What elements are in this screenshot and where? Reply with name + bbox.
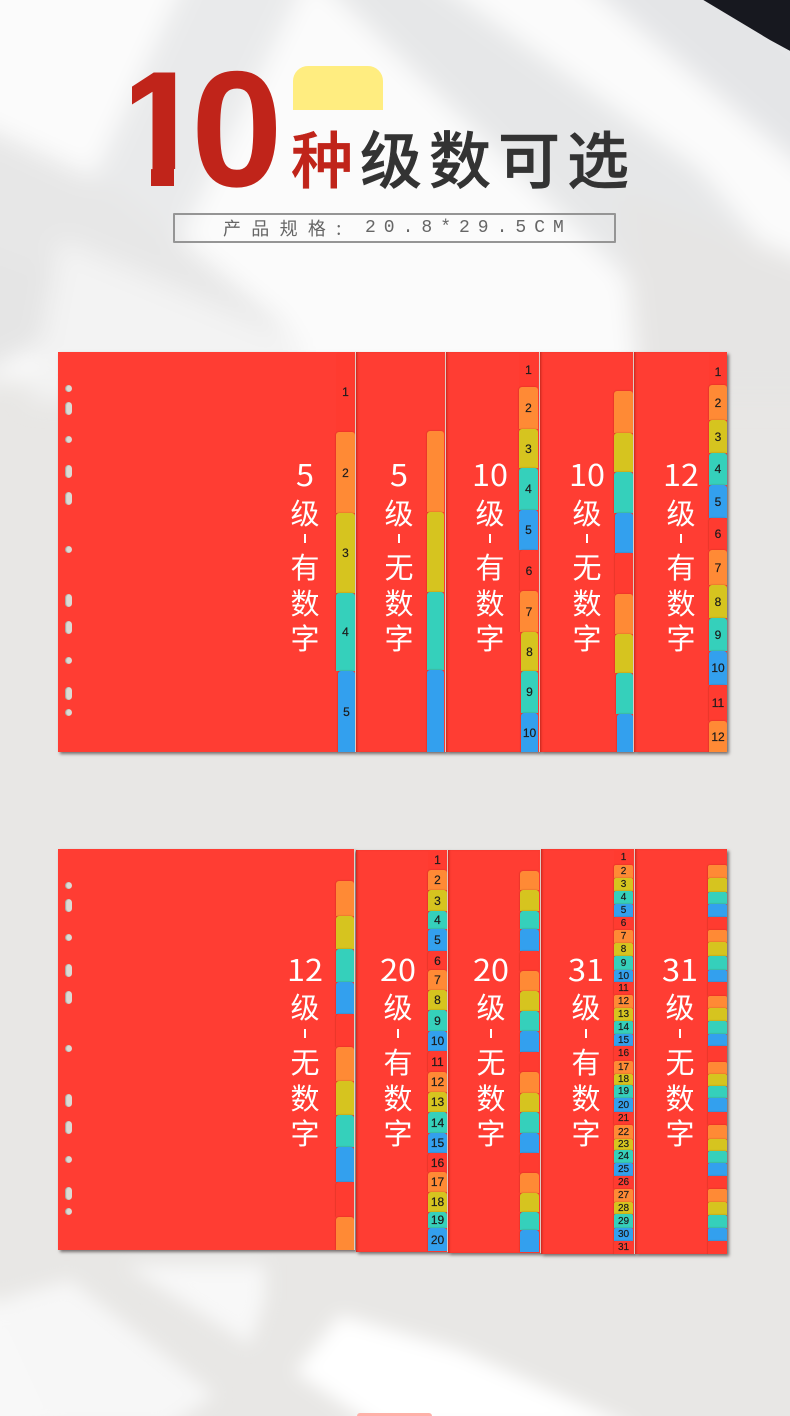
tabs: 5 numbered: 1 (342, 385, 349, 399)
label: 12 numbered: 字 (666, 616, 696, 658)
tabs: 5 numbered: 5 (343, 704, 350, 718)
tabs: 10 numbered: 9 (526, 685, 533, 699)
tabs: 20 numbered: 7 (434, 973, 441, 987)
tabs: 10 numbered: 1 (525, 362, 532, 376)
tabs: 12 numbered: 2 (715, 396, 721, 410)
label: 12 plain: 无 (290, 1040, 320, 1082)
big number 10 (132, 37, 283, 221)
tabs: 20 numbered: 16 (431, 1156, 444, 1170)
label: 5 numbered: 有 (290, 545, 320, 587)
label: 5 plain: 数 (384, 581, 414, 623)
tabs: 31 numbered: 2 (621, 866, 626, 877)
label: 12 numbered: 12 (663, 451, 699, 495)
label: 31 plain: 字 (665, 1111, 694, 1153)
label: 10 plain: 数 (572, 581, 602, 623)
tabs: 31 numbered: 13 (618, 1009, 629, 1020)
title text: 种级数可选 (291, 111, 636, 201)
label: 31 plain: 级 (665, 985, 694, 1027)
tabs: 31 numbered: 30 (618, 1229, 629, 1240)
tabs: 31 numbered: 31 (618, 1242, 629, 1253)
tabs: 31 numbered: 5 (621, 905, 626, 916)
label: 20 plain (473, 946, 509, 1153)
punch holes row 2 (65, 882, 72, 1215)
label: 5 numbered: 字 (290, 616, 320, 658)
label: 20 numbered: 有 (383, 1040, 412, 1082)
label: 20 numbered (380, 946, 416, 1153)
tabs: 31 numbered: 26 (618, 1177, 629, 1188)
label: 12 plain: 数 (290, 1076, 320, 1118)
tabs: 31 numbered: 21 (618, 1113, 629, 1124)
label: 5 plain: 5 (390, 451, 408, 495)
label: 12 plain (287, 946, 323, 1153)
tabs: 12 numbered: 4 (715, 462, 721, 476)
label: 12 numbered (663, 451, 699, 658)
tabs: 5 plain (426, 430, 444, 752)
label: 20 numbered: 级 (383, 985, 412, 1027)
label: 12 plain: 字 (290, 1111, 320, 1153)
tabs: 31 numbered: 24 (618, 1151, 629, 1162)
panel: 31 levels numbered (541, 849, 635, 1254)
tabs: 31 numbered: 9 (621, 958, 626, 968)
tabs: 12 numbered: 9 (715, 628, 721, 642)
label: 10 numbered: 有 (475, 545, 504, 587)
label: 31 numbered: 字 (571, 1111, 600, 1153)
tabs: 12 numbered: 3 (715, 430, 721, 444)
tabs: 20 numbered: 11 (431, 1054, 444, 1068)
label: 10 plain (569, 451, 605, 658)
tabs: 12 numbered: 10 (711, 661, 725, 675)
tabs: 5 numbered: 4 (342, 625, 349, 639)
label: 31 plain: 31 (662, 946, 698, 990)
tabs: 20 numbered: 20 (431, 1232, 444, 1246)
tabs: 20 numbered: 13 (431, 1095, 444, 1109)
panel: 20 levels plain (448, 850, 541, 1253)
tabs: 10 plain (613, 390, 633, 752)
bottom pink shape (357, 1413, 432, 1416)
label: 12 numbered: 数 (666, 581, 696, 623)
panel: 10 levels plain (540, 352, 634, 752)
tabs: 12 plain (335, 880, 354, 1250)
tabs: 31 numbered: 8 (621, 944, 626, 955)
label: 5 plain: 级 (384, 491, 414, 533)
label: 20 numbered: 数 (383, 1076, 412, 1118)
label: 31 plain: 数 (665, 1076, 694, 1118)
tabs: 31 numbered: 18 (618, 1074, 629, 1085)
label: 5 plain (384, 451, 414, 658)
tabs: 31 numbered: 28 (618, 1202, 629, 1214)
tabs: 31 numbered: 10 (618, 970, 629, 982)
tabs: 12 numbered (708, 364, 727, 752)
label: 10 plain: 字 (572, 616, 602, 658)
tabs: 20 numbered: 18 (431, 1195, 444, 1209)
tabs: 12 numbered: 5 (715, 494, 721, 508)
tabs: 20 numbered: 8 (434, 993, 441, 1007)
label: 12 numbered: 级 (666, 491, 696, 533)
tabs: 20 numbered: 3 (434, 894, 441, 908)
tabs: 5 numbered (335, 385, 355, 752)
tabs: 12 numbered: 8 (715, 594, 721, 608)
tabs: 31 numbered (613, 852, 633, 1254)
panel: 10 levels numbered (446, 352, 540, 752)
tabs: 31 numbered: 25 (618, 1164, 629, 1175)
panel: 31 levels plain (635, 849, 727, 1254)
label: 20 numbered: 20 (380, 946, 416, 990)
tabs: 31 numbered: 15 (618, 1034, 629, 1046)
label: 10 numbered: 字 (475, 616, 504, 658)
label: 10 plain: 无 (572, 545, 602, 587)
tabs: 20 plain (519, 870, 539, 1252)
tabs: 10 numbered: 5 (525, 523, 532, 537)
label: 20 numbered: 字 (383, 1111, 412, 1153)
label: 20 plain: 级 (476, 985, 506, 1027)
tabs: 31 numbered: 17 (618, 1062, 629, 1073)
panel: 5 levels numbered (58, 352, 356, 752)
product spec box: 20.8*29.5CM (365, 218, 572, 238)
tabs: 31 numbered: 27 (618, 1190, 629, 1201)
tabs: 12 numbered: 1 (715, 364, 721, 378)
label: 20 plain: 20 (473, 946, 509, 990)
big number 10: 1 (114, 37, 206, 221)
label: 31 numbered (568, 946, 604, 1153)
tabs: 31 numbered: 29 (618, 1216, 629, 1226)
tabs: 31 numbered: 1 (621, 852, 626, 862)
tabs: 10 numbered (518, 362, 538, 752)
label: 31 numbered: 有 (571, 1040, 600, 1082)
tabs: 20 numbered: 12 (431, 1075, 444, 1089)
product spec box (173, 213, 616, 243)
label: 5 plain: 无 (384, 545, 414, 587)
tabs: 31 numbered: 20 (618, 1100, 629, 1110)
product spec box: 产品规格: (223, 215, 352, 241)
tabs: 10 numbered: 10 (523, 726, 536, 740)
label: 31 plain: 无 (665, 1040, 694, 1082)
tabs: 10 numbered: 6 (526, 564, 532, 578)
panel: 20 levels numbered (356, 850, 448, 1252)
label: 20 plain: 字 (476, 1111, 506, 1153)
tabs: 20 numbered: 1 (434, 853, 441, 867)
tabs: 31 plain (707, 864, 727, 1254)
label: 31 plain (662, 946, 698, 1153)
label: 5 numbered (290, 451, 320, 658)
tabs: 31 numbered: 11 (618, 983, 629, 994)
tabs: 5 numbered: 3 (342, 546, 349, 560)
label: 31 numbered: 数 (571, 1076, 600, 1118)
tabs: 31 numbered: 23 (618, 1139, 629, 1150)
label: 5 plain: 字 (384, 616, 414, 658)
label: 5 numbered: 级 (290, 491, 320, 533)
tabs: 31 numbered: 14 (618, 1022, 629, 1033)
label: 10 numbered: 级 (475, 491, 504, 533)
panel: 12 levels numbered (634, 352, 727, 752)
tabs: 20 numbered: 17 (431, 1175, 444, 1189)
tabs: 10 numbered: 3 (525, 442, 532, 456)
big number 10: 0 (191, 37, 283, 221)
tabs: 10 numbered: 4 (525, 482, 532, 496)
tabs: 31 numbered: 16 (618, 1048, 629, 1059)
tabs: 31 numbered: 22 (618, 1126, 629, 1138)
tabs: 20 numbered (427, 853, 447, 1251)
label: 20 plain: 数 (476, 1076, 506, 1118)
tabs: 31 numbered: 7 (621, 931, 626, 942)
tabs: 20 numbered: 5 (434, 933, 441, 947)
tabs: 20 numbered: 14 (431, 1116, 444, 1130)
tabs: 10 numbered: 7 (526, 604, 532, 618)
label: 10 plain: 级 (572, 491, 602, 533)
label: 10 numbered: 数 (475, 581, 504, 623)
label: 5 numbered: 数 (290, 581, 320, 623)
tabs: 10 numbered: 8 (526, 644, 533, 658)
tabs: 20 numbered: 15 (431, 1136, 444, 1150)
tabs: 12 numbered: 7 (715, 560, 721, 574)
tabs: 31 numbered: 19 (618, 1086, 629, 1097)
tabs: 12 numbered: 12 (711, 730, 725, 744)
label: 12 plain: 12 (287, 946, 323, 990)
panel: 12 levels plain (58, 849, 355, 1250)
tabs: 20 numbered: 19 (431, 1213, 444, 1227)
tabs: 10 numbered: 2 (525, 401, 532, 415)
label: 31 numbered: 级 (571, 985, 600, 1027)
tabs: 20 numbered: 2 (434, 873, 441, 887)
tabs: 20 numbered: 6 (434, 954, 441, 968)
tabs: 31 numbered: 4 (621, 892, 626, 903)
yellow tab accent (293, 66, 383, 110)
panel: 5 levels plain (356, 352, 446, 752)
label: 12 numbered: 有 (666, 545, 696, 587)
tabs: 31 numbered: 3 (621, 879, 626, 890)
label: 10 numbered (472, 451, 508, 658)
label: 20 plain: 无 (476, 1040, 506, 1082)
label: 10 plain: 10 (569, 451, 605, 495)
tabs: 20 numbered: 10 (431, 1034, 444, 1048)
label: 12 plain: 级 (290, 985, 320, 1027)
label: 5 numbered: 5 (296, 451, 314, 495)
label: 10 numbered: 10 (472, 451, 508, 495)
tabs: 20 numbered: 4 (434, 913, 441, 927)
label: 31 numbered: 31 (568, 946, 604, 990)
tabs: 20 numbered: 9 (434, 1014, 441, 1028)
tabs: 12 numbered: 6 (715, 527, 721, 541)
tabs: 12 numbered: 11 (712, 696, 724, 710)
tabs: 31 numbered: 6 (621, 918, 626, 929)
tabs: 31 numbered: 12 (618, 996, 629, 1007)
punch holes row 1 (65, 385, 72, 716)
tabs: 5 numbered: 2 (342, 466, 349, 480)
